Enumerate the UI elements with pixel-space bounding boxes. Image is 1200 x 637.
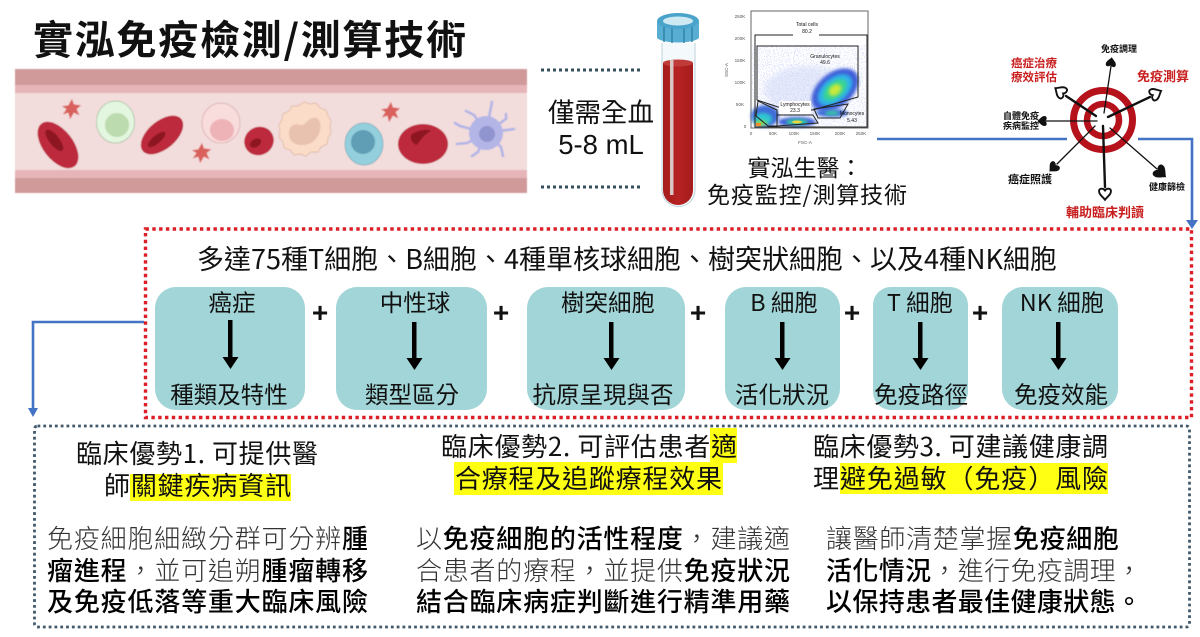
axis labels: SSC-A — [724, 62, 729, 77]
platelet 1 — [62, 99, 81, 119]
advantage 1: 及免疫低落等重大臨床風險 — [47, 582, 368, 619]
labels: 癌症照護 — [1008, 171, 1052, 187]
text: sample volume — [548, 91, 654, 160]
advantage 3: 理避免過敏（免疫）風險 — [813, 459, 1108, 496]
blue connector top right — [877, 139, 1198, 229]
labels: 輔助臨床判讀 — [1066, 202, 1144, 221]
card: T cell — [873, 284, 968, 410]
panel heading: 多達75種T細胞、B細胞、4種單核球細胞、樹突狀細胞、以及4種NK細胞 — [197, 238, 1057, 277]
card: NK cell: NK 細胞 — [1020, 284, 1104, 318]
title: 實泓免疫檢測/測算技術 — [33, 8, 466, 66]
platelet 3 — [381, 102, 400, 122]
dotted connector bottom — [541, 186, 640, 188]
gate labels: 23.3 — [790, 108, 800, 114]
gate labels: Total cells — [796, 22, 818, 28]
red blood cell 2 — [134, 108, 190, 162]
red blood cell 4 — [398, 124, 448, 164]
axis labels: 0 — [744, 124, 747, 129]
plus: + — [972, 297, 988, 328]
axis labels: 150K — [735, 58, 746, 63]
card: B cell: 活化狀況 — [735, 376, 829, 410]
card: cancer — [155, 284, 305, 410]
blue connector left — [28, 322, 144, 417]
red blood cell 3 — [239, 121, 279, 161]
pink granulocyte — [202, 103, 240, 143]
axis labels: FSC-A — [798, 140, 813, 145]
labels: 自體免疫 — [1003, 109, 1039, 122]
illustration: blood vessel with cells — [15, 69, 527, 193]
plus: + — [690, 297, 706, 328]
advantage 3 — [813, 427, 1142, 619]
red blood cell 1 — [30, 114, 86, 176]
text: company caption — [707, 149, 907, 210]
dotted connector top — [541, 68, 640, 72]
axis labels: 0 — [750, 131, 753, 136]
plus: + — [844, 297, 860, 328]
advantage 1: 免疫細胞細緻分群可分辨腫 — [47, 519, 368, 556]
arrow tips: white hearts — [1052, 83, 1164, 200]
gate labels: 5.43 — [847, 118, 857, 124]
labels: 健康篩檢 — [1149, 180, 1185, 193]
text: sample volume: 僅需全血 — [548, 91, 654, 130]
axis labels — [724, 14, 867, 145]
scatter background — [752, 45, 867, 127]
gate labels — [779, 22, 865, 124]
lymphocyte density blob — [778, 117, 816, 127]
advantage 1: 師關鍵疾病資訊 — [104, 466, 291, 503]
granulocyte density blob — [803, 60, 867, 120]
target — [1074, 90, 1132, 150]
advantage 3: 臨床優勢3. 可建議健康調 — [813, 427, 1108, 464]
panel: immune cell types — [146, 229, 1192, 418]
card: cancer: 種類及特性 — [170, 376, 288, 410]
advantage 1 — [47, 434, 368, 619]
advantage 2 — [416, 427, 790, 619]
advantage 2: 合患者的療程，並提供免疫狀況 — [416, 551, 790, 588]
advantage 2: 結合臨床病症判斷進行精準用藥 — [416, 582, 790, 619]
panel: clinical advantages — [34, 426, 1190, 627]
card: T cell: T 細胞 — [887, 284, 953, 318]
axis labels: 100K — [789, 131, 800, 136]
dendritic cell — [455, 102, 514, 156]
gate labels: Granulocytes — [810, 54, 840, 60]
card: dendritic cell — [527, 284, 685, 410]
icon: blood test tube — [657, 13, 699, 206]
text: sample volume: 5-8 mL — [558, 129, 644, 160]
arrows — [1046, 66, 1157, 187]
labels: 免疫測算 — [1137, 66, 1189, 85]
text: company caption: 實泓生醫： — [748, 149, 862, 183]
card: cancer: 癌症 — [208, 284, 256, 318]
monocyte density blob — [816, 109, 848, 117]
chart: flow cytometry scatter plot — [724, 11, 868, 145]
card: neutrophil: 類型區分 — [365, 376, 459, 410]
advantage 1: 瘤進程，並可追朔腫瘤轉移 — [47, 551, 368, 588]
gate labels: Lymphocytes — [780, 102, 810, 108]
labels — [1003, 42, 1189, 221]
axis labels: 250K — [735, 14, 746, 19]
advantage 2: 以免疫細胞的活性程度，建議適 — [416, 519, 790, 556]
plus: + — [312, 297, 328, 328]
axis labels: 50K — [769, 131, 778, 136]
gates — [755, 35, 867, 127]
plus: + — [493, 297, 509, 328]
arrow tips: black hearts — [1037, 57, 1171, 183]
labels: 疾病監控 — [1003, 119, 1039, 132]
debris density blob — [751, 105, 779, 127]
green lymphocyte — [96, 101, 134, 143]
gate labels: Monocytes — [840, 111, 865, 117]
axis labels: 50K — [736, 102, 745, 107]
diagram: target with arrows — [1003, 42, 1189, 221]
card: dendritic cell: 抗原呈現與否 — [532, 376, 674, 410]
advantage 2: 臨床優勢2. 可評估患者適 — [441, 427, 737, 464]
card: dendritic cell: 樹突細胞 — [561, 284, 655, 318]
advantage 2: 合療程及追蹤療程效果 — [455, 459, 722, 496]
card: NK cell: 免疫效能 — [1014, 376, 1108, 410]
gate labels: 80.2 — [802, 29, 812, 35]
advantage 3: 以保持患者最佳健康狀態。 — [826, 582, 1142, 619]
axis labels: 200K — [835, 131, 846, 136]
card: NK cell — [1002, 284, 1118, 410]
axis labels: 100K — [735, 80, 746, 85]
card: neutrophil: 中性球 — [380, 284, 450, 318]
axis labels: 200K — [735, 36, 746, 41]
card: B cell: B 細胞 — [750, 284, 818, 318]
card: B cell — [725, 284, 840, 410]
card: neutrophil — [336, 284, 487, 410]
advantage 3: 活化情況，進行免疫調理， — [826, 551, 1142, 588]
text: company caption: 免疫監控/測算技術 — [707, 176, 907, 210]
platelet 2 — [192, 143, 211, 163]
advantage 1: 臨床優勢1. 可提供醫 — [76, 434, 318, 471]
labels: 癌症治療 — [1011, 55, 1057, 71]
axis labels: 250K — [856, 131, 867, 136]
labels: 免疫調理 — [1101, 42, 1137, 55]
card: T cell: 免疫路徑 — [874, 376, 968, 410]
peach monocyte — [279, 102, 331, 156]
advantage 3: 讓醫師清楚掌握免疫細胞 — [826, 519, 1119, 556]
labels: 療效評估 — [1011, 69, 1057, 85]
blue lymphocyte — [345, 123, 383, 165]
axis labels: 150K — [810, 131, 821, 136]
gate labels: 49.6 — [820, 60, 830, 66]
